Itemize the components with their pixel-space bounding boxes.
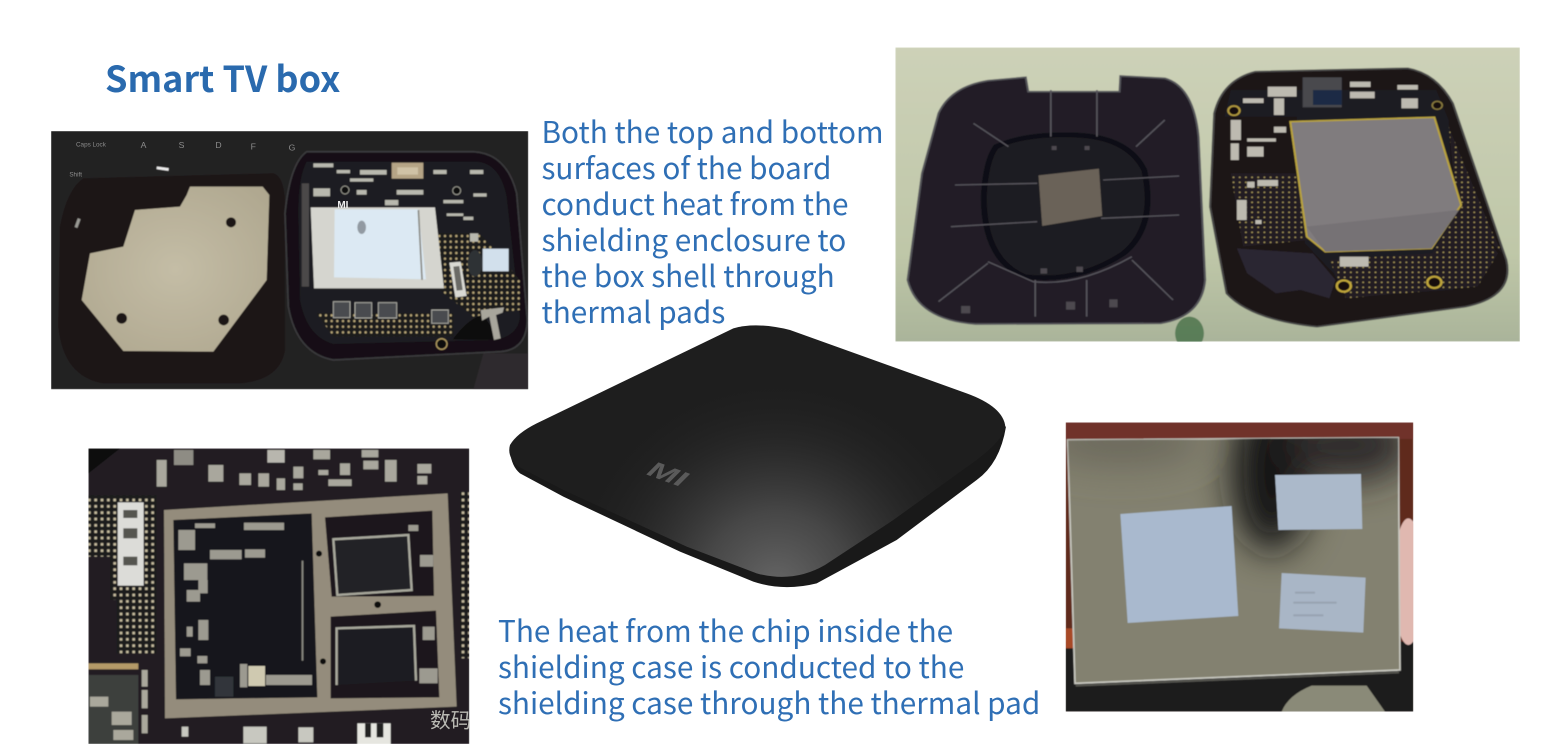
grey shield pad (1290, 117, 1461, 252)
photo: opened box with metal shield and thermal pad (51, 131, 528, 389)
text block: top and bottom surfaces: Both the top and bottom (542, 108, 884, 152)
"MI" mark on the board: MI (337, 200, 349, 211)
watermark: 数码 (430, 709, 471, 732)
PCB dots (437, 233, 520, 317)
metal frame (164, 493, 457, 718)
text block: top and bottom surfaces: surfaces of the board (542, 144, 831, 188)
text block: top and bottom surfaces: shielding enclosure to (542, 216, 846, 260)
text block: chip heat to shielding case: shielding case is conducted to the (498, 643, 964, 687)
lower left block (88, 663, 138, 669)
large pad (1120, 506, 1238, 623)
white thermal pad (311, 207, 444, 288)
text block: top and bottom surfaces: conduct heat from the (542, 180, 848, 224)
photo: box shell and shielded board, top view (895, 47, 1520, 350)
top components (157, 450, 431, 490)
keyboard legends: G (289, 143, 296, 153)
keyboard legends: D (215, 140, 222, 150)
components row (333, 302, 448, 323)
inner parts (333, 535, 412, 595)
photo: board with shielding frame (88, 448, 471, 744)
bottom (182, 723, 391, 744)
text block: top and bottom surfaces: the box shell through (542, 252, 835, 296)
photo: Mi box product (509, 325, 1006, 587)
lid plate (1068, 438, 1400, 683)
keyboard legends (70, 142, 295, 176)
keyboard legends: Shift (69, 172, 82, 179)
keyboard legends: S (179, 140, 185, 150)
metal plate (82, 187, 269, 352)
keyboard legends: F (251, 141, 256, 151)
device top surface (509, 325, 1005, 577)
keyboard legends: Caps Lock (76, 142, 107, 149)
title: Smart TV box (105, 51, 340, 103)
logo: MI (640, 458, 696, 491)
keyboard legends: A (141, 140, 147, 150)
left shell (908, 76, 1205, 324)
sim slot (1303, 77, 1342, 107)
small pads (1275, 474, 1362, 530)
right shell (1210, 68, 1508, 327)
device side edge (510, 420, 1006, 587)
text block: chip heat to shielding case: The heat from the chip inside the (498, 607, 953, 651)
barcode (118, 502, 144, 586)
photo: shield lid with three thermal pads (1066, 422, 1414, 712)
text block: chip heat to shielding case: shielding case through the thermal pad (498, 679, 1040, 723)
text block: top and bottom surfaces: thermal pads (542, 288, 725, 332)
